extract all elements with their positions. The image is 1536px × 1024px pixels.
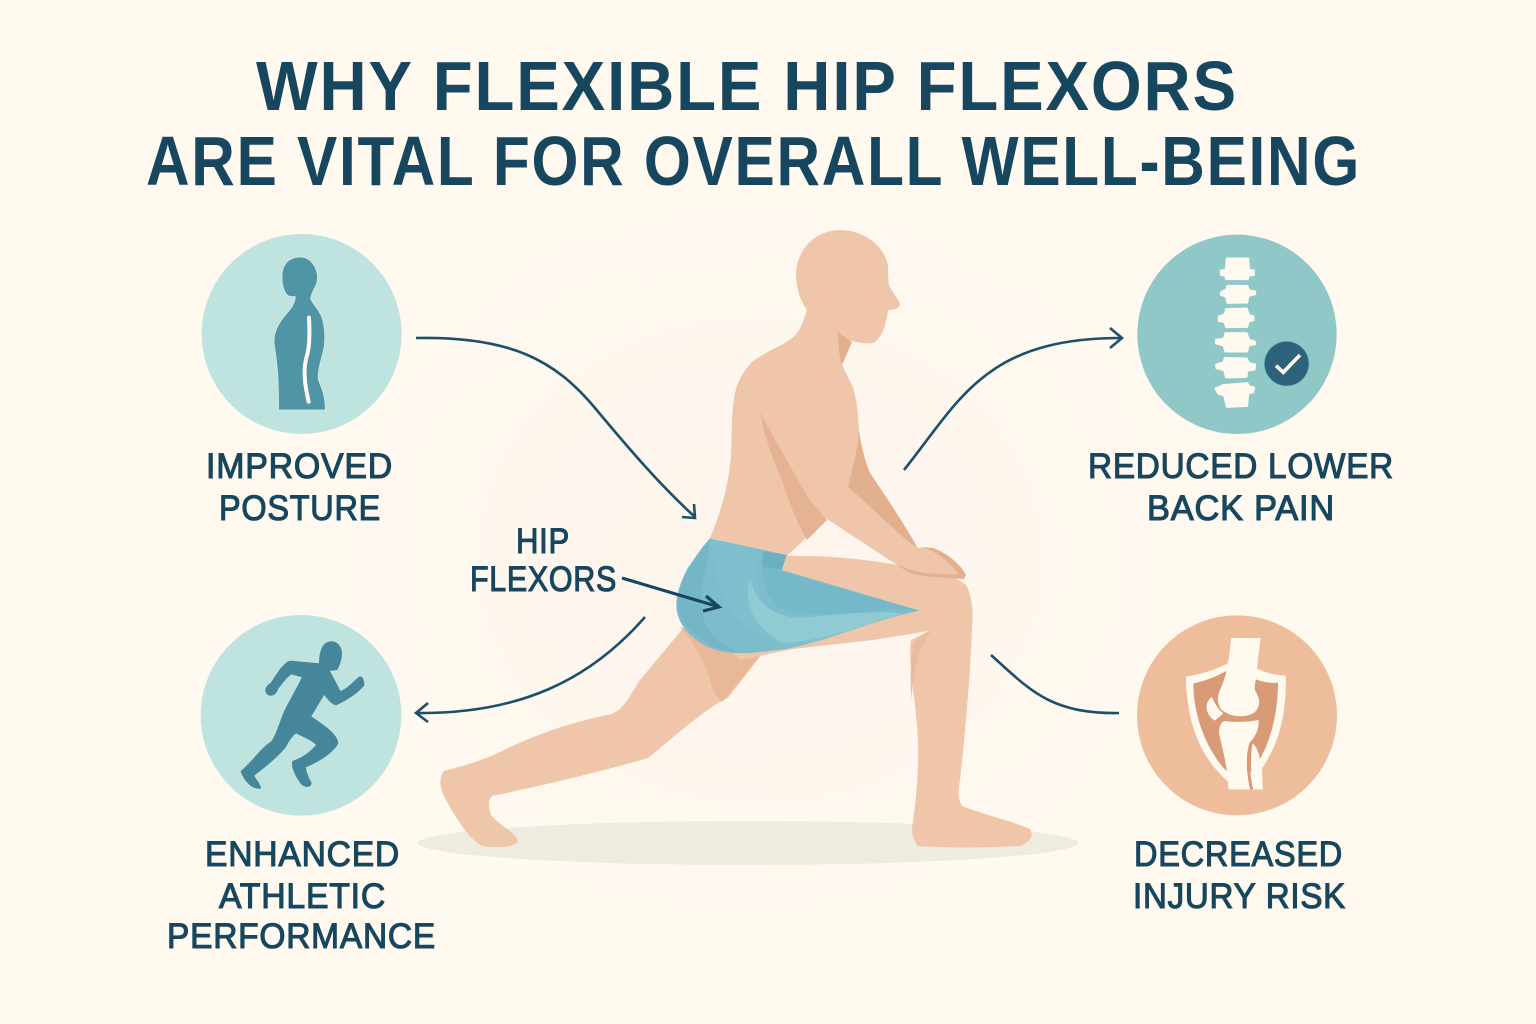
label: decreased injury risk: DECREASED <box>1134 835 1343 874</box>
icon: spine with check <box>1137 235 1337 434</box>
torso <box>710 300 859 556</box>
label: reduced lower back pain <box>1088 447 1394 528</box>
label: improved posture <box>206 447 393 528</box>
label: improved posture: IMPROVED <box>206 447 393 486</box>
label: hip flexors: FLEXORS <box>470 560 617 599</box>
back leg shade <box>680 627 763 702</box>
panel: decreased injury risk <box>1133 615 1346 916</box>
knee shade <box>911 630 932 700</box>
arrow: athletic performance <box>416 617 645 722</box>
central figure: lunging body <box>440 230 1032 848</box>
title: WHY FLEXIBLE HIP FLEXORS <box>256 47 1238 125</box>
arrow: hip flexors pointer <box>622 578 719 611</box>
title <box>146 47 1361 200</box>
label: enhanced athletic performance: ATHLETIC <box>219 877 386 916</box>
label: decreased injury risk <box>1133 835 1346 916</box>
label: reduced lower back pain: BACK PAIN <box>1147 489 1335 528</box>
panel: improved posture <box>202 234 402 528</box>
icon: knee joint <box>1137 615 1337 815</box>
ground shadow <box>418 821 1078 865</box>
panel: enhanced athletic performance <box>167 615 436 956</box>
back leg <box>440 620 765 847</box>
front arm <box>760 377 965 579</box>
label: enhanced athletic performance <box>167 835 436 956</box>
label: enhanced athletic performance: ENHANCED <box>205 835 400 874</box>
label: hip flexors: HIP <box>516 522 570 561</box>
arrow: posture <box>416 338 695 518</box>
torso side shade <box>760 412 827 540</box>
panel: reduced lower back pain <box>1088 235 1394 528</box>
label: enhanced athletic performance: PERFORMANCE <box>167 917 436 956</box>
label: decreased injury risk: INJURY RISK <box>1133 877 1346 916</box>
neck shade <box>838 332 852 365</box>
icon: runner silhouette <box>201 615 401 816</box>
title: ARE VITAL FOR OVERALL WELL-BEING <box>146 122 1361 200</box>
label: improved posture: POSTURE <box>219 489 381 528</box>
arrow: lower back <box>904 328 1122 470</box>
arrow: injury risk connector <box>991 655 1119 713</box>
dark arm behind <box>822 377 920 552</box>
head <box>796 230 900 343</box>
label: hip flexors <box>470 522 617 599</box>
front leg <box>700 556 1032 848</box>
label: reduced lower back pain: REDUCED LOWER <box>1088 447 1394 486</box>
icon: posture silhouette <box>202 234 402 434</box>
shorts / hip flexor muscle <box>676 538 919 653</box>
hand shade <box>897 547 966 579</box>
